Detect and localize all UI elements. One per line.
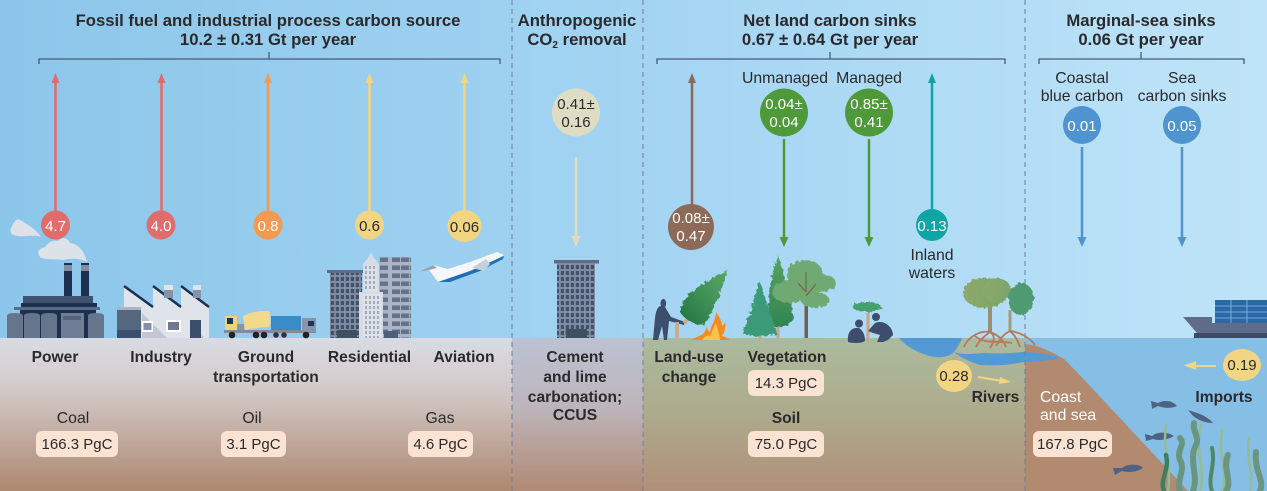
arrow and value: inland waters [916, 73, 948, 241]
label: imports: Imports [1195, 389, 1253, 406]
arrow and value: industry [146, 73, 176, 240]
arrow and value: residential: 0.6 [359, 218, 380, 235]
coastal shelf [1025, 344, 1188, 491]
icon: factory [117, 285, 209, 338]
arrow and value: power [41, 73, 70, 240]
pill: coal: 166.3 PgC [42, 436, 113, 453]
label: sea carbon sinks: Sea [1168, 70, 1196, 87]
arrow and value: residential [355, 73, 384, 240]
pill: coast and sea [1033, 431, 1112, 457]
icon: plane [419, 252, 504, 282]
icon: city buildings [327, 252, 411, 338]
value and arrow: rivers: 0.28 [939, 368, 969, 385]
arrow and value: land-use change: 0.47 [676, 228, 706, 245]
arrow and value: sea [1163, 106, 1201, 247]
heading: removal: 2 [552, 40, 558, 51]
label: soil: Soil [772, 410, 800, 427]
label: coastal blue carbon [1041, 70, 1123, 105]
arrow and value: CO2 removal [552, 88, 600, 247]
heading: land: Net land carbon sinks [743, 11, 917, 30]
icon: smoke [10, 219, 87, 262]
heading: land: 0.67 ± 0.64 Gt per year [742, 30, 919, 49]
label: rivers: Rivers [972, 389, 1020, 406]
heading: marginal sea [1066, 11, 1216, 49]
icon: fish [1113, 401, 1213, 475]
background: fossil ground [0, 338, 512, 491]
value and arrow: rivers [936, 360, 1011, 392]
label: coast and sea: Coast [1040, 389, 1082, 406]
icon: seagrass [1163, 423, 1261, 491]
background: land ground [643, 338, 1025, 491]
arrow and value: aviation: 0.06 [450, 219, 479, 236]
arrow and value: unmanaged [760, 88, 808, 247]
icon: truck [224, 311, 316, 338]
label: sea carbon sinks [1138, 70, 1226, 105]
arrow and value: managed: 0.41 [854, 114, 884, 131]
pill: vegetation: 14.3 PgC [755, 375, 817, 392]
bracket: land [657, 52, 1005, 64]
label: coast and sea: and sea [1040, 407, 1096, 424]
label: cement and lime carbonation; CCUS: Cement [546, 349, 604, 366]
heading: marginal sea: 0.06 Gt per year [1078, 30, 1204, 49]
background: sea [1025, 338, 1267, 491]
label: ground transportation: transportation [213, 369, 319, 386]
arrow and value: power: 4.7 [45, 218, 66, 235]
icon: people planting [848, 302, 893, 343]
label: cement and lime carbonation; CCUS: and lime [543, 369, 607, 386]
pill: oil [221, 431, 286, 457]
label: vegetation: Vegetation [748, 349, 826, 366]
label: inland waters [908, 247, 955, 282]
value and arrow: imports [1184, 349, 1261, 381]
label: cement and lime carbonation; CCUS [528, 349, 622, 424]
heading: fossil: Fossil fuel and industrial process carbon source [76, 11, 460, 30]
arrow and value: coastal: 0.01 [1067, 118, 1097, 135]
pill: coast and sea: 167.8 PgC [1037, 436, 1108, 453]
label: power: Power [32, 349, 78, 366]
arrow and value: CO2 removal: 0.41± [557, 96, 595, 113]
label: inland waters: Inland [910, 247, 954, 264]
arrow and value: managed: 0.85± [850, 96, 888, 113]
heading: removal: CO [527, 30, 552, 49]
icon: fire [691, 312, 730, 340]
label: coal: Coal [57, 410, 89, 427]
label: inland waters: waters [908, 265, 955, 282]
background: removal ground [512, 338, 643, 491]
label: land-use change [654, 349, 724, 386]
arrow and value: CO2 removal: 0.16 [561, 114, 591, 131]
icon: person chopping tree [653, 270, 728, 340]
label: cement and lime carbonation; CCUS: carbonation; [528, 389, 622, 406]
arrow and value: land-use change: 0.08± [672, 210, 710, 227]
water inlet and river [899, 338, 1059, 365]
pill: soil [748, 431, 824, 457]
bracket: sea [1039, 52, 1244, 64]
icon: trees [743, 255, 836, 340]
pill: vegetation [748, 370, 824, 396]
arrow and value: managed [845, 88, 893, 247]
arrow and value: ground transportation: 0.8 [258, 218, 278, 235]
label: cement and lime carbonation; CCUS: CCUS [553, 407, 597, 424]
label: residential: Residential [328, 349, 411, 366]
label: managed: Managed [836, 70, 902, 87]
arrow and value: sea: 0.05 [1167, 118, 1197, 135]
bracket: fossil [39, 52, 500, 64]
heading: marginal sea: Marginal-sea sinks [1066, 11, 1216, 30]
heading: removal: Anthropogenic [518, 11, 636, 30]
arrow and value: unmanaged: 0.04± [765, 96, 803, 113]
arrow and value: industry: 4.0 [151, 218, 171, 235]
label: coastal blue carbon: Coastal [1055, 70, 1109, 87]
label: land-use change: change [662, 369, 717, 386]
label: land-use change: Land-use [654, 349, 724, 366]
label: unmanaged: Unmanaged [742, 70, 828, 87]
label: oil: Oil [242, 410, 262, 427]
arrow and value: unmanaged: 0.04 [769, 114, 799, 131]
label: industry: Industry [130, 349, 192, 366]
heading: removal: removal [558, 30, 627, 49]
pill: oil: 3.1 PgC [226, 436, 281, 453]
value and arrow: imports: 0.19 [1227, 357, 1257, 374]
arrow and value: land-use change [668, 73, 714, 250]
pill: soil: 75.0 PgC [755, 436, 817, 453]
label: aviation: Aviation [434, 349, 494, 366]
label: ground transportation [213, 349, 319, 386]
label: coastal blue carbon: blue carbon [1041, 88, 1123, 105]
icon: power plant [7, 263, 104, 338]
heading: fossil: 10.2 ± 0.31 Gt per year [180, 30, 357, 49]
arrow and value: inland waters: 0.13 [917, 218, 947, 235]
icon: cement building [554, 260, 599, 338]
label: gas: Gas [426, 410, 455, 427]
arrow and value: ground transportation [254, 73, 282, 240]
label: coast and sea [1040, 389, 1096, 424]
heading: land [742, 11, 919, 49]
pill: coal [36, 431, 118, 457]
label: sea carbon sinks: carbon sinks [1138, 88, 1226, 105]
arrow and value: aviation [448, 73, 482, 242]
background: sky [0, 0, 1267, 338]
icon: cargo ship [1183, 300, 1267, 338]
pill: gas [408, 431, 473, 457]
label: ground transportation: Ground [238, 349, 294, 366]
pill: gas: 4.6 PgC [413, 436, 468, 453]
dashed dividers [512, 0, 1025, 491]
icon: mangroves [963, 278, 1035, 348]
heading: removal [518, 11, 636, 51]
heading: fossil [76, 11, 460, 49]
arrow and value: coastal [1063, 106, 1101, 247]
